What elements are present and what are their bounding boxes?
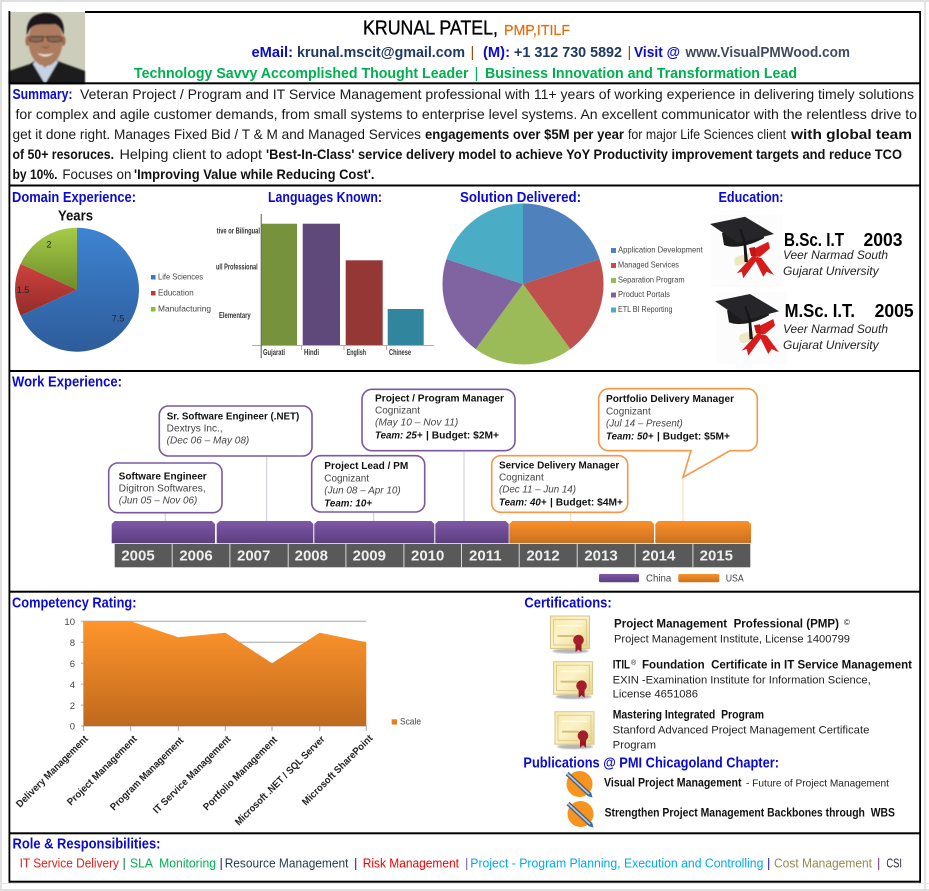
legend: solutions: ETL BI Reporting [618,304,673,314]
contact line: +1 312 730 5892 [514,45,622,61]
job: project program manager [362,389,515,451]
icon: graduation cap 1 [710,215,782,287]
panel: role and responsibilities: | [877,856,880,871]
contact line: eMail: [252,45,293,61]
job: project program manager: Project / Program Manager [375,394,504,405]
panel: domain experience [12,189,211,352]
area chart: competency: 6 [70,659,75,670]
degree: M.Sc.: Gujarat University [783,340,880,352]
pie chart: solutions [442,203,604,364]
job: project program manager: Team: 25+ [375,431,423,442]
publication: strengthen backbones: Strengthen Project Management Backbones through WBS [605,808,895,820]
panel: role and responsibilities: Risk Management [363,856,459,871]
job: service delivery manager: (Dec 11 – Jun 14) [499,485,576,496]
contact line: Visit @ [634,45,680,61]
certification: ITIL: EXIN -Examination Institute for Information Science, [613,675,871,687]
summary text block: Helping client to adopt [120,146,262,162]
job: project lead: Project Lead / PM [324,461,408,472]
panel: publications [523,755,895,828]
icon: graduation cap 2 [715,292,787,364]
certification: ITIL: License 4651086 [613,689,698,701]
area chart: competency [14,617,376,828]
certification: ITIL: ITIL [613,660,630,672]
timeline year band: 2010 [411,547,444,564]
legend: solutions: Managed Services [618,259,679,269]
summary text block: Focuses on [62,166,131,182]
photo [9,12,85,84]
degree: M.Sc.: 2005 [875,301,914,321]
degree: B.Sc.: 2003 [864,230,902,250]
job: project program manager: | Budget: $2M+ [426,431,499,442]
area chart: competency: 2 [70,701,75,712]
timeline year band: 2013 [584,547,618,564]
panel: role and responsibilities: | [122,856,126,871]
contact line: (M): [483,45,510,61]
panel: role and responsibilities: Resource Management [225,856,349,871]
timeline year band: 2012 [526,547,560,564]
summary text block: engagements over $5M per year [425,126,625,142]
contact line: | [628,45,631,61]
timeline year band: 2014 [642,547,676,564]
area chart: competency: 8 [70,638,75,649]
panel: role and responsibilities: | [354,856,357,871]
certification: Stanford [613,710,869,752]
panel: role and responsibilities: CSI [886,856,902,871]
certification: Stanford: Mastering Integrated Program [613,710,764,722]
panel: certifications: Certifications: [524,594,612,611]
certification: ITIL [613,659,912,701]
job: project program manager: (May 10 – Nov 11) [375,418,458,429]
panel: domain experience: Years [58,208,93,225]
job: project program manager: Cognizant [375,406,420,417]
job: software engineer: Software Engineer [119,471,207,482]
summary text block: with global team [790,126,912,142]
bar chart: languages [216,214,434,358]
icon: certificate 3 [555,712,594,749]
contact line: krunal.mscit@gmail.com [297,45,465,61]
legend: solutions: Separation Program [618,274,685,284]
certification: PMP [614,618,850,646]
job: sr software engineer: Sr. Software Engineer (.NET) [167,411,299,422]
certification: PMP: Project Management Institute, License 1400799 [614,634,850,646]
degree: B.Sc.: Veer Narmad South [783,250,888,262]
area chart: competency: Microsoft .NET / SQL Server [233,734,327,828]
summary text block: get it done right. Manages Fixed Bid / T & M and Managed Services [12,126,421,142]
panel: work experience [12,374,757,584]
job: project lead: (Jun 08 – Apr 10) [324,485,401,496]
job: software engineer [109,463,222,513]
job: service delivery manager [492,456,628,512]
icon: certificate 1 [550,616,590,654]
timeline location tabs [112,521,751,543]
bar chart: languages: Chinese [389,347,411,357]
timeline year band: 2011 [469,547,502,564]
area chart: competency: 0 [70,722,75,732]
bar chart: languages: Elementary [219,310,251,320]
bar chart: languages: tive or Bilingual [217,226,260,236]
job: portfolio delivery manager callout [599,389,757,477]
panel: education: Education: [718,189,784,206]
panel: domain experience: Domain Experience: [12,189,136,206]
legend: china and usa: USA [726,573,744,584]
timeline year band [115,544,750,567]
bar chart: languages: Gujarati [263,347,285,357]
legend: solutions: Product Portals [618,289,670,299]
legend: domain [151,272,211,314]
certification: ITIL: ® [631,659,637,667]
tagline: Technology Savvy Accomplished Thought Leader [134,65,469,82]
timeline year band: 2009 [353,547,386,564]
panel: role and responsibilities: Cost Management [774,856,872,871]
bar chart: languages: English [347,347,366,357]
area chart: competency: Project Management [65,733,140,808]
area chart: competency: Portfolio Management [201,734,280,813]
contact line [252,45,850,61]
degree: M.Sc. [783,301,914,352]
summary text block: Veteran Project / Program and IT Service Management professional with 11+ years of working experience in delivering timely solutions [80,86,914,102]
name heading: PMP,ITILF [504,22,570,39]
timeline year band: 2006 [179,547,213,564]
summary text block: Summary: [12,86,72,103]
panel: role and responsibilities: Role & Responsibilities: [12,835,160,852]
panel: languages known [216,189,434,358]
panel: work experience: Work Experience: [12,374,122,391]
panel: education [710,189,914,364]
publication: visual project management: Visual Project Management [604,778,742,790]
degree: B.Sc. [783,230,902,278]
timeline year band: 2008 [295,547,328,564]
certification: PMP: Project Management Professional (PMP) [614,619,839,631]
job: service delivery manager: Service Delivery Manager [499,460,619,471]
job: portfolio delivery manager callout: Portfolio Delivery Manager [606,394,734,405]
tagline: Business Innovation and Transformation Lead [485,65,797,82]
timeline stems [165,451,683,521]
job: sr software engineer: (Dec 06 – May 08) [167,436,249,447]
pie chart: domain years: 2 [46,240,52,250]
legend: solutions [611,245,703,314]
panel: languages known: Languages Known: [268,189,382,206]
icon: publication pencil 1 [566,771,592,798]
panel: role and responsibilities: | [767,856,770,871]
legend: domain: Manufacturing [158,304,211,314]
job: software engineer: Digitron Softwares, [119,484,206,495]
summary text block [12,86,917,182]
job: portfolio delivery manager callout: Cognizant [606,406,651,417]
publication: visual project management: - Future of Project Management [746,778,889,790]
contact line: www.VisualPMWood.com [685,45,850,61]
contact line: | [470,45,474,61]
pie chart: domain years: 7.5 [112,314,124,324]
certification: ITIL: Foundation Certificate in IT Service Management [642,660,912,672]
tagline [134,65,797,82]
panel: solution delivered [442,189,703,364]
job: service delivery manager: Team: 40+ [499,498,547,509]
job: project lead: Team: 10+ [324,498,372,509]
pie chart: domain years: 1.5 [17,285,29,295]
summary text block: by 10%. [12,166,58,182]
panel: solution delivered: Solution Delivered: [460,189,581,206]
icon: publication pencil 2 [568,801,594,828]
degree: M.Sc.: M.Sc. I.T. [785,301,855,321]
panel: role and responsibilities: IT Service Delivery [20,856,119,871]
summary text block: for major Life Sciences client [628,126,786,142]
job: project lead: Cognizant [324,473,369,484]
panel: role and responsibilities [12,835,902,871]
panel: competency rating: Competency Rating: [12,595,136,612]
publication: visual project management [604,778,889,790]
certification: Stanford: Stanford Advanced Project Management Certificate [613,725,869,737]
job: service delivery manager: Cognizant [499,473,544,484]
certification: Stanford: Program [613,740,656,752]
panel: competency rating [12,595,421,828]
timeline year band: 2005 [121,547,155,564]
degree: B.Sc.: B.Sc. I.T [784,230,844,250]
name heading: KRUNAL PATEL, [363,18,498,40]
area chart: competency: IT Service Management [151,734,234,816]
timeline year band: 2015 [700,547,733,564]
job: project lead [312,456,425,512]
legend: china and usa: China [646,573,672,584]
bar chart: languages: Hindi [304,347,319,357]
legend: china and usa [599,573,744,584]
legend: domain: Life Sciences [158,272,203,282]
degree: B.Sc.: Gujarat University [783,266,880,278]
area chart: competency: Microsoft SharePoint [300,733,376,808]
job: service delivery manager: | Budget: $4M+ [550,498,623,509]
bar chart: languages: ull Professional [216,262,258,272]
area chart: competency: Delivery Management [14,733,91,810]
summary text block: for complex and agile customer demands, from small systems to enterprise level systems. An excellent communicator with the relentless drive to [16,106,917,122]
legend: domain: Education [158,288,194,298]
panel: publications: Publications @ PMI Chicagoland Chapter: [523,755,779,772]
panel: role and responsibilities: Project - Program Planning, Execution and Controlling [470,856,763,871]
degree: M.Sc.: Veer Narmad South [783,324,888,336]
panel: certifications [524,594,912,752]
certification: PMP: © [844,618,850,627]
panel: role and responsibilities: SLA Monitoring [130,856,216,871]
area chart: competency: Program Management [108,735,187,813]
summary text block: of 50+ resoruces. [12,146,114,162]
timeline year band: 2007 [237,547,270,564]
job: software engineer: (Jun 05 – Nov 06) [119,496,197,507]
panel: role and responsibilities: | [465,856,468,871]
job: portfolio delivery manager callout: | Budget: $5M+ [657,431,730,442]
area chart: competency: 4 [70,680,75,691]
legend: scale [392,717,421,728]
summary text block: 'Improving Value while Reducing Cost'. [134,166,374,182]
tagline: | [474,65,478,82]
job: sr software engineer: Dextrys Inc., [167,424,223,435]
job: sr software engineer [159,406,312,456]
job: portfolio delivery manager callout: Team: 50+ [606,431,654,442]
panel: role and responsibilities: | [220,856,223,871]
pie chart: domain years [15,228,139,352]
icon: certificate 2 [554,662,593,699]
legend: solutions: Application Development [618,245,703,255]
legend: scale: Scale [400,717,421,728]
job: portfolio delivery manager callout: (Jul 14 – Present) [606,418,683,429]
area chart: competency: 10 [64,617,75,628]
